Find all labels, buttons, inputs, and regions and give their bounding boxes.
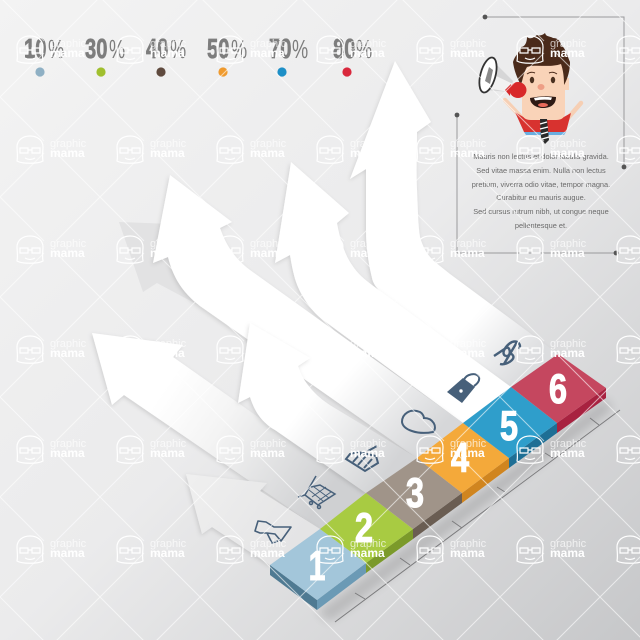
callout text: Sed cursus rutrum nibh, ut congue neque <box>473 207 609 216</box>
label 70% <box>269 34 308 65</box>
callout text: Mauris non lectus et dolor iaculis gravida. <box>473 152 609 161</box>
arrow 3 <box>238 323 417 493</box>
step numbers: 4 <box>451 434 469 481</box>
label 80%: 80 <box>333 34 355 65</box>
label 50%: % <box>231 35 247 64</box>
arms <box>505 100 581 118</box>
step 2 <box>320 493 413 573</box>
eyes and nose <box>527 72 557 90</box>
arrow 5 <box>275 162 511 423</box>
step 6 <box>511 354 606 433</box>
callout frame <box>455 15 626 255</box>
callout text: Curabitur eu mauris augue. <box>496 193 586 202</box>
step numbers <box>309 365 567 589</box>
arrow 1 <box>186 474 320 565</box>
step numbers: 1 <box>309 542 325 589</box>
callout text: pellentesque et. <box>515 221 567 230</box>
step 3 <box>366 458 462 539</box>
arrow 6 <box>350 61 558 387</box>
hair <box>513 33 570 85</box>
step 4 <box>417 423 509 503</box>
step numbers: 6 <box>549 365 567 412</box>
icon: megaphone <box>255 521 291 543</box>
label 30% <box>85 34 125 65</box>
label 50%: 50 <box>207 34 229 65</box>
icon: dollar sign <box>494 342 520 364</box>
label 70%: % <box>292 35 308 64</box>
platform shadow <box>317 398 612 622</box>
icon: shopping cart <box>298 476 335 508</box>
callout text: pretium, viverra odio vitae, tempor magna. <box>472 180 610 189</box>
callout text <box>472 152 610 230</box>
label 40%: 40 <box>146 34 168 65</box>
percent labels <box>24 34 372 65</box>
ghost arrow shadow <box>119 222 240 306</box>
label 50% <box>207 34 247 65</box>
face <box>522 60 565 120</box>
icon: basket hand <box>346 446 378 471</box>
character with megaphone <box>476 33 581 144</box>
step numbers: 3 <box>406 469 424 516</box>
label 10%: % <box>48 35 64 64</box>
glove <box>510 82 526 98</box>
step numbers: 5 <box>500 402 518 449</box>
label 80%: % <box>356 35 372 64</box>
shirt <box>515 112 571 132</box>
arrow 4 <box>153 175 463 458</box>
label 40% <box>146 34 186 65</box>
step 5 <box>463 387 557 468</box>
megaphone <box>476 56 513 94</box>
arrow 2 <box>92 333 366 529</box>
ruler <box>335 410 620 622</box>
label 30%: % <box>109 35 125 64</box>
step 1 <box>270 529 366 610</box>
mouth <box>530 96 556 108</box>
step numbers: 2 <box>355 504 373 551</box>
label 30%: 30 <box>85 34 107 65</box>
label 80% <box>333 34 372 65</box>
legend dots <box>35 67 352 77</box>
label 70%: 70 <box>269 34 291 65</box>
icon: padlock <box>447 374 479 403</box>
platform steps <box>270 354 606 610</box>
callout text: Sed vitae massa enim. Nulla non lectus <box>476 166 606 175</box>
icon: heart <box>402 411 435 433</box>
label 40%: % <box>170 35 186 64</box>
label 10% <box>24 34 64 65</box>
label 10%: 10 <box>24 34 46 65</box>
tie <box>540 119 549 144</box>
